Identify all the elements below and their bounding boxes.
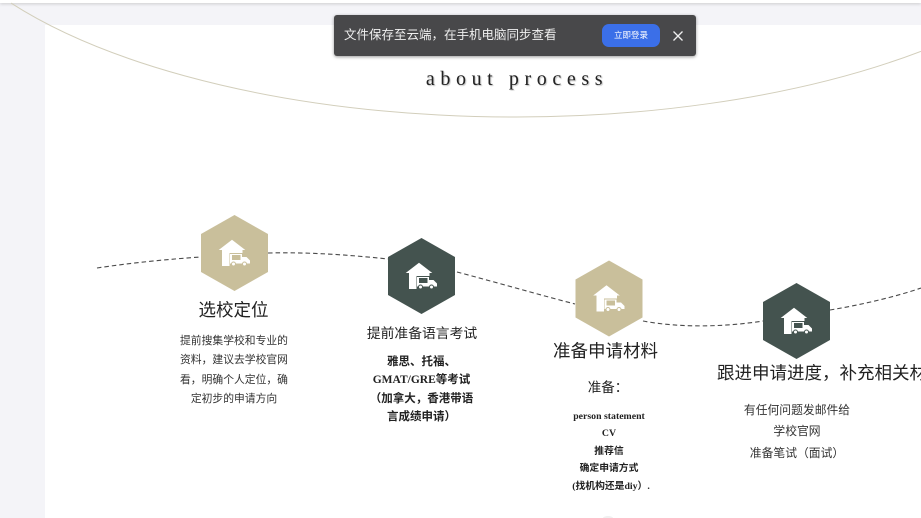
- login button: 立即登录: [614, 30, 648, 40]
- step 1: description: 定初步的申请方向: [191, 393, 277, 405]
- close icon: [673, 31, 683, 41]
- icon: hexagon step 1: [201, 215, 268, 291]
- toast notification: [334, 15, 696, 56]
- next step hint at page edge: [603, 516, 613, 518]
- icon: hexagon step 3: [576, 260, 642, 336]
- step 2: description: GMAT/GRE等考试: [373, 374, 470, 386]
- step 3: sub-heading: 准备：: [588, 380, 628, 395]
- top bar: [0, 0, 921, 3]
- step 3: materials list: 确定申请方式: [580, 463, 638, 474]
- step 1: heading: 选校定位: [198, 300, 268, 320]
- step 1: description: 资料，建议去学校官网: [180, 354, 288, 366]
- step 3: materials list: 推荐信: [594, 446, 624, 456]
- dashed wave path: [97, 253, 921, 326]
- step 1: description: 看，明确个人定位，确: [180, 374, 288, 386]
- step 3: materials list: [572, 410, 650, 492]
- step 3: materials list: CV: [602, 428, 616, 439]
- step 2: heading: 提前准备语言考试: [367, 326, 477, 341]
- title: about process: [426, 68, 608, 90]
- step 2: description: 雅思、托福、: [387, 356, 456, 368]
- step 1: description: [180, 334, 288, 405]
- icon: hexagon step 2: [388, 238, 455, 314]
- step 2: description: 言成绩申请）: [387, 411, 456, 423]
- login button: [602, 24, 660, 47]
- step 4: description: [744, 403, 850, 460]
- decorative arc: [11, 3, 921, 117]
- step 3: heading: 准备申请材料: [553, 340, 658, 360]
- step 3: materials list: person statement: [573, 410, 645, 422]
- toast message: 文件保存至云端，在手机电脑同步查看: [344, 28, 557, 42]
- step 1: description: 提前搜集学校和专业的: [180, 335, 288, 347]
- step 2: description: [370, 355, 473, 423]
- step 4: description: 学校官网: [773, 424, 821, 438]
- step 2: description: （加拿大，香港带语: [370, 393, 473, 405]
- step 4: description: 有任何问题发邮件给: [744, 403, 850, 417]
- step 4: description: 准备笔试（面试）: [750, 446, 844, 460]
- step 3: materials list: (找机构还是diy）.: [572, 480, 650, 492]
- icon: hexagon step 4: [763, 283, 830, 359]
